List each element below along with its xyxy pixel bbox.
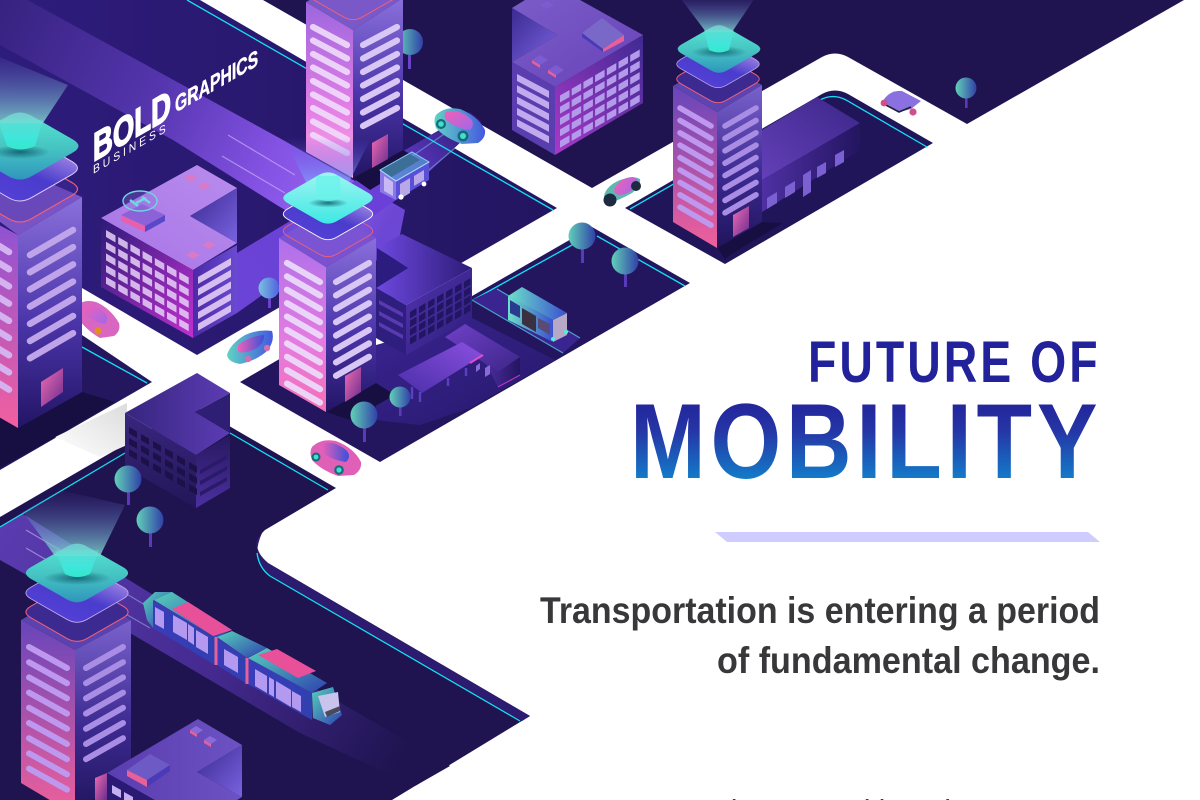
bus lane tile [472,288,580,353]
tower 4 right [673,0,762,248]
tower 5 lower left [21,490,131,800]
building: hospital with helipad [101,165,237,338]
car: teal left road [227,330,273,364]
tower 5 plates [23,490,128,641]
city ground: upper-left block [0,0,557,355]
low building near tower 4 [762,97,860,212]
tower 4 plates [677,0,760,103]
tree [568,222,596,263]
logo word GRAPHICS: GRAPHICS [175,44,258,118]
city ground: far-left block [0,280,152,470]
tram car 3 [247,648,327,720]
logo: Bold Business Graphics [93,44,258,177]
city ground: lower-left block [0,405,530,800]
building: top centre [512,0,643,155]
car: blue teal top road [434,108,485,144]
car: pink behind tower [77,301,119,338]
tree [612,248,638,287]
subtitle text: Transportation is entering a period [540,590,1100,631]
blue light beam above tower 3 [283,137,370,190]
road shadow [55,403,127,457]
city ground: central block [240,227,690,462]
tower 2 top centre [305,0,403,178]
vehicle: canopy car [881,91,921,116]
tower 3 plates [283,172,373,257]
tree [258,278,280,308]
tram rear cab [143,592,173,628]
city ground: top-right block [263,0,1184,188]
tower 1 left [0,45,82,428]
guideway light streaks [26,130,455,628]
helipad [121,191,165,232]
divider bar [715,532,1100,542]
tram car 2 [216,631,267,684]
building: dark block lower left [125,373,230,508]
bus: electric shuttle [508,287,568,342]
vehicle: small pod [604,173,641,206]
elevated guideway A [0,0,405,262]
logo word BUSINESS: BUSINESS [93,121,166,177]
tree [397,29,423,69]
tree [350,402,378,442]
tree [390,386,410,416]
elevated guideway C [0,514,450,786]
tram [143,592,342,725]
tower 3 centre [279,172,376,412]
tower 1 plates [0,45,78,222]
tram front cab [312,687,342,725]
title: Future of: FUTURE OF [808,330,1098,395]
bus: autonomous shuttle [380,152,429,200]
city ground: tower block right [625,90,933,264]
building: dark office centre [376,234,472,355]
rim below white panel [256,533,530,721]
car: pink lower road [310,440,361,476]
building: bottom [95,719,242,800]
title: Mobility: MOBILITY [630,382,1098,502]
tree [114,466,142,505]
tree [956,78,976,108]
tram car 1 [153,592,232,665]
subtitle text [540,590,1100,681]
logo word BOLD: BOLD [93,82,171,171]
tree [136,506,164,547]
subtitle text: of fundamental change. [717,640,1100,681]
station ground tile [376,318,555,425]
cyan curb lines [0,0,927,721]
tile shadows [0,150,783,468]
station building [398,324,520,402]
elevated guideway B [237,112,482,313]
